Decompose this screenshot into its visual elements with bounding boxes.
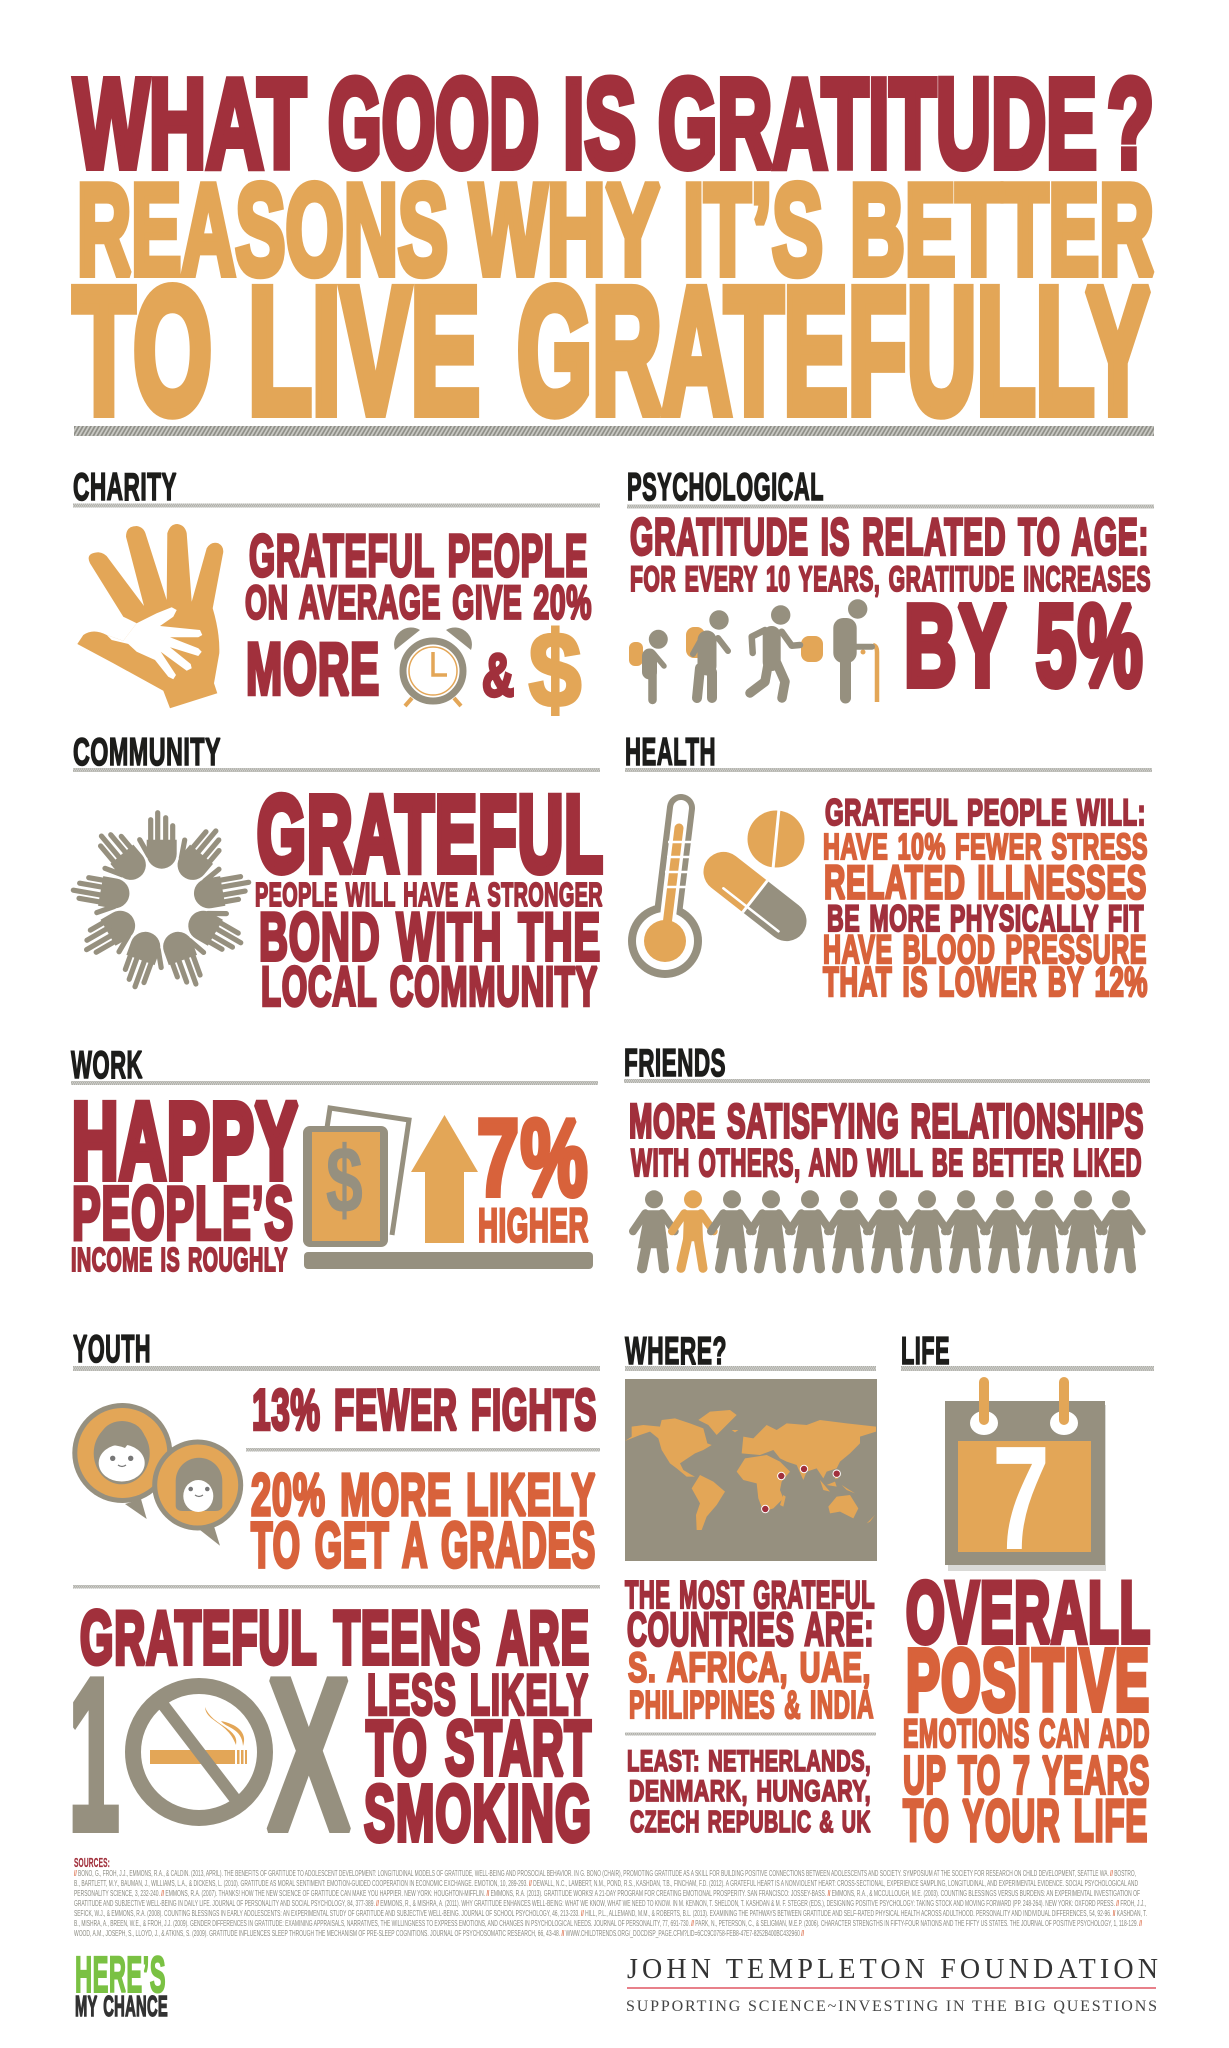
- sources heading: SOURCES:: [74, 1855, 110, 1870]
- title line: what good is gratitude: WHAT: [74, 52, 306, 194]
- title line: reasons why: REASONS: [77, 158, 448, 302]
- text: ampersand: &: [482, 642, 515, 709]
- heading: where: WHERE?: [625, 1330, 727, 1373]
- icon: row of people: [633, 1190, 1142, 1268]
- africa: [737, 1455, 790, 1512]
- icon: boy speech bubble: [72, 1403, 172, 1519]
- text: 7%: 7%: [477, 1097, 589, 1219]
- text: happy: HAPPY: [72, 1081, 299, 1201]
- panel: youth: [68, 1328, 600, 1877]
- panel: community: [70, 731, 604, 1017]
- heading: friends: FRIENDS: [624, 1042, 726, 1085]
- icon: people of rising age: [629, 599, 877, 702]
- heading: life: LIFE: [901, 1330, 950, 1373]
- text: countries are: COUNTRIES ARE:: [627, 1603, 874, 1656]
- panel: life: [901, 1330, 1154, 1854]
- icon: hands: [77, 524, 223, 708]
- child: [629, 630, 668, 700]
- title: [73, 52, 1154, 450]
- youth: [686, 610, 729, 698]
- logo: here's my chance: [75, 1946, 168, 2023]
- title line: what good is gratitude: ?: [1107, 52, 1154, 194]
- south america: [692, 1475, 725, 1530]
- icon: up arrow: [411, 1115, 478, 1243]
- icon: calendar: [945, 1382, 1106, 1581]
- title line: reasons why: WHY: [470, 158, 660, 302]
- text: grateful: GRATEFUL: [257, 774, 604, 894]
- icon: ring of hands: [70, 813, 252, 993]
- text: most grateful countries: THE MOST GRATEFUL: [625, 1574, 875, 1617]
- logo: john templeton foundation: [626, 1954, 1158, 2015]
- adult walking: [750, 605, 823, 698]
- australia: [828, 1495, 858, 1518]
- heading: youth: YOUTH: [73, 1328, 151, 1371]
- text: fewer fights: 13% FEWER FIGHTS: [252, 1378, 597, 1442]
- icon: capsule: [695, 844, 815, 949]
- icon: banknotes: $: [326, 1127, 364, 1232]
- number: 10x with no-smoking sign: X: [267, 1633, 353, 1877]
- panel: work: [71, 1044, 598, 1279]
- icon: girl speech bubble: [152, 1440, 243, 1546]
- title line: reasons why: IT’S: [683, 158, 823, 302]
- title line: to live gratefully: LIVE: [248, 250, 480, 450]
- text: more: MORE: [246, 627, 380, 710]
- icon: banknotes: [303, 1108, 409, 1247]
- title line: what good is gratitude: IS: [563, 52, 636, 194]
- panel: psychological: [627, 466, 1154, 710]
- text: grateful people: GRATEFUL PEOPLE: [249, 523, 588, 589]
- text: less likely: LESS LIKELY: [367, 1663, 589, 1727]
- text: more likely: 20% MORE LIKELY: [251, 1462, 596, 1528]
- panel: charity: [73, 466, 600, 729]
- text: on average give: ON AVERAGE GIVE 20%: [245, 576, 592, 629]
- panel: friends: [624, 1042, 1150, 1268]
- world map: [625, 1379, 877, 1561]
- heading: community: COMMUNITY: [73, 731, 221, 774]
- number: 10x with no-smoking sign: [68, 1633, 353, 1877]
- sources: [74, 1855, 1147, 1938]
- title line: to live gratefully: [73, 250, 1150, 450]
- eurasia: [742, 1420, 876, 1480]
- icon: alarm clock: [394, 627, 472, 706]
- heading: work: WORK: [71, 1044, 143, 1087]
- heading: health: HEALTH: [625, 731, 716, 774]
- icon: dollar sign: $: [529, 611, 583, 729]
- number: 10x with no-smoking sign: 1: [68, 1633, 122, 1877]
- heading: psychological: PSYCHOLOGICAL: [627, 466, 824, 509]
- islands: [732, 1430, 875, 1523]
- panel: health: [625, 731, 1152, 1005]
- text: least grateful line 1: LEAST: NETHERLANDS,: [627, 1745, 871, 1778]
- logo: john templeton foundation: JOHN TEMPLETON FOUNDATION: [627, 1954, 1158, 1985]
- icon: round pill: [748, 809, 804, 869]
- text: grateful teens are: GRATEFUL TEENS ARE: [80, 1596, 590, 1680]
- calendar number: 7: [992, 1416, 1052, 1581]
- title line: to live gratefully: TO: [73, 250, 212, 450]
- text: philippines and india: PHILIPPINES & INDIA: [629, 1684, 874, 1727]
- text: a grades: TO GET A GRADES: [251, 1509, 596, 1581]
- title line: reasons why: [77, 158, 1154, 302]
- icon: no smoking: [150, 1702, 247, 1804]
- text: local community: LOCAL COMMUNITY: [261, 954, 598, 1017]
- sources list: [74, 1869, 1147, 1938]
- elder with cane: [833, 599, 877, 702]
- map pins: [762, 1465, 840, 1513]
- greenland: [698, 1410, 737, 1435]
- text: people's: PEOPLE’S: [72, 1171, 294, 1255]
- text: least grateful line 2: DENMARK, HUNGARY,: [629, 1775, 871, 1808]
- text: to start: TO START: [366, 1706, 592, 1792]
- north america: [625, 1418, 712, 1477]
- text: people will have a stronger: PEOPLE WILL HAVE A STRONGER: [255, 877, 603, 914]
- text: HERE’S: [75, 1946, 166, 2003]
- logo: john templeton foundation: SUPPORTING SCIENCE~INVESTING IN THE BIG QUESTIONS: [626, 1998, 1157, 2015]
- title line: what good is gratitude: GOOD: [328, 52, 539, 194]
- icon: thermometer: [628, 808, 702, 978]
- logo: here's my chance: MY CHANCE: [75, 1991, 168, 2023]
- text: bond with the: BOND WITH THE: [259, 899, 601, 975]
- text: income is roughly: INCOME IS ROUGHLY: [71, 1242, 288, 1279]
- sources list: WOOD, A.M., JOSEPH, S., LLOYD, J., & ATKINS, S. (2009). GRATITUDE INFLUENCES SLEEP THROUGH THE MECHANISM OF PRE-SLEEP COGNITIONS. JOURNAL OF PSYCHOSOMATIC RESEARCH, 66, 43-48. // WWW.CHILDTRENDS.ORG/_DOCDISP_PAGE.CFM?LID=6CC9C0758-FEB8-47E7-8252B400BC432960 //: [74, 1929, 804, 1938]
- title line: what good is gratitude: [74, 52, 1154, 194]
- text: smoking: SMOKING: [364, 1768, 592, 1858]
- text: s. africa, uae: S. AFRICA, UAE,: [628, 1644, 871, 1691]
- text: least grateful line 3: CZECH REPUBLIC & UK: [630, 1804, 871, 1839]
- heading: charity: CHARITY: [73, 466, 177, 509]
- text: higher: HIGHER: [478, 1199, 589, 1252]
- base bar: [304, 1252, 593, 1269]
- panel: where: [625, 1330, 877, 1839]
